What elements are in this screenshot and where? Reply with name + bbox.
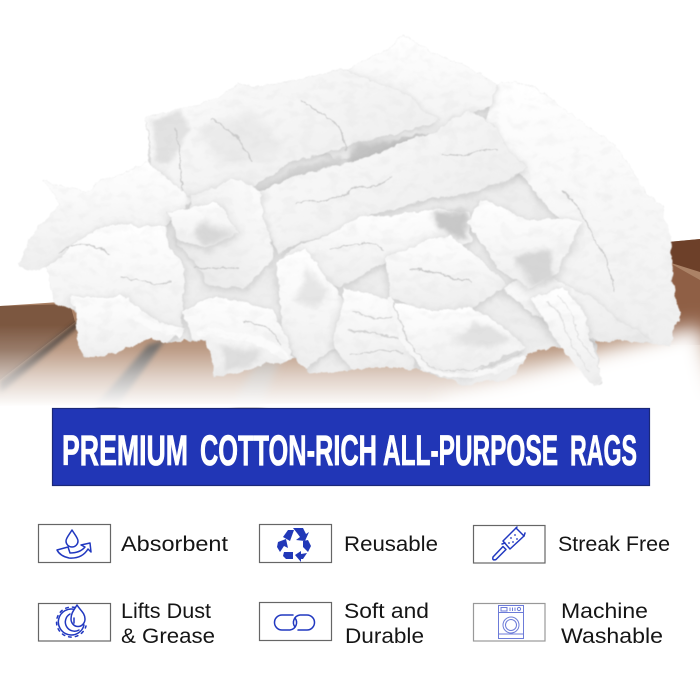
feature: lifts dust and grease (38, 600, 215, 648)
icon: chain link (260, 602, 332, 640)
icon: washing machine (474, 604, 545, 641)
center upper folds (180, 180, 270, 290)
crumpled left shoulder (150, 110, 190, 165)
top sheet (300, 37, 497, 160)
tail (533, 287, 601, 386)
label: lifts dust and grease: & Grease (121, 625, 215, 648)
label: reusable: Reusable (344, 533, 438, 556)
left shoulder (44, 162, 191, 228)
feature: streak free (474, 526, 670, 563)
mid band (258, 112, 527, 258)
front cloth h (395, 304, 530, 375)
wooden floor (0, 239, 700, 430)
title text: ALL-PURPOSE (383, 427, 558, 475)
stacked layers (335, 285, 415, 372)
hem strip (392, 298, 527, 375)
icon: gear with drop (38, 604, 110, 641)
label: lifts dust and grease: Lifts Dust (121, 600, 211, 623)
texture (352, 202, 482, 258)
label: machine washable: Washable (561, 625, 663, 648)
back middle (280, 210, 470, 285)
icon: lint roller brush (474, 526, 545, 563)
flap f (387, 235, 510, 308)
right flowing cloth (504, 280, 650, 344)
lobe a (165, 203, 237, 245)
rag pile (0, 30, 700, 390)
title text: COTTON-RICH (200, 427, 377, 475)
flap e (467, 202, 582, 290)
right mass (480, 83, 690, 360)
feature: absorbent (38, 524, 228, 562)
crease lines (60, 100, 615, 345)
lobe b (273, 255, 345, 370)
title banner (52, 408, 650, 486)
label: absorbent: Absorbent (121, 533, 228, 556)
title text: RAGS (570, 427, 637, 475)
title text: PREMIUM (62, 427, 188, 475)
icon: recycle (260, 524, 332, 562)
label: streak free: Streak Free (558, 533, 670, 556)
icon: water drop with arrow (38, 524, 110, 562)
label: machine washable: Machine (561, 600, 648, 623)
feature: reusable (260, 524, 438, 562)
upper left sheet (145, 70, 440, 188)
label: soft and durable: Soft and (344, 600, 429, 623)
label: soft and durable: Durable (345, 625, 424, 648)
feature: machine washable (474, 600, 663, 648)
left front (47, 225, 185, 340)
left hem roll (68, 297, 185, 357)
feature: soft and durable (260, 600, 433, 648)
lobe c (180, 296, 294, 358)
gap shade (348, 134, 418, 162)
